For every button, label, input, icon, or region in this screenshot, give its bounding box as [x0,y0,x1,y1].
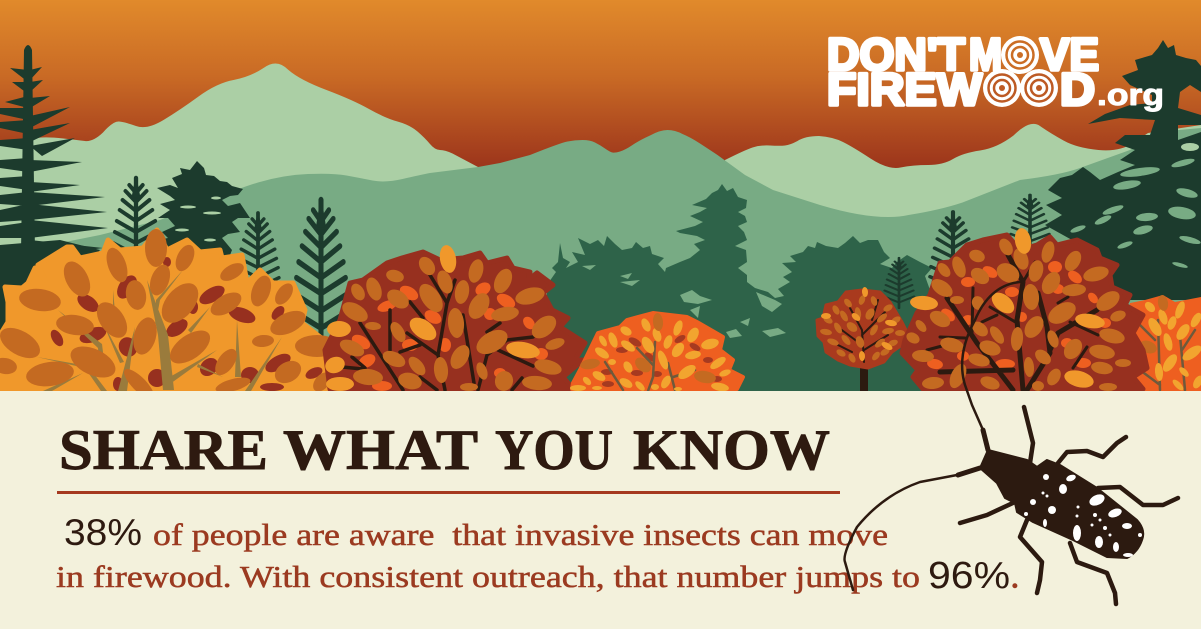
beetle legs [960,407,1178,604]
orange leaves [926,261,1111,370]
right bush leaves [1129,300,1201,392]
logo ring O right [1020,69,1058,107]
leafy pine, left-centre [157,161,250,282]
cream lower panel [0,391,1201,629]
dark branches [342,275,533,390]
body line 1 stat: 38% [64,512,142,553]
logo wordmark: Don't: DON'T [827,29,965,80]
small tree leaves [820,294,905,364]
heading: KNOW [633,419,830,482]
closing period: . [1011,560,1019,595]
beetle white spots [1024,473,1142,557]
tan branches [37,270,282,391]
small tree branches [835,300,888,362]
beetle antennae [844,282,1020,590]
forest light gaps [582,265,786,338]
yellow leaves [570,317,732,393]
brown leaves [579,313,717,385]
right bush brown leaves [1137,294,1169,356]
divider rule [57,491,840,494]
brown leaves [904,236,1131,392]
heading [59,419,830,482]
pine trees, right [1045,40,1201,300]
logo ring O top [1001,36,1039,74]
orange-brown leaves of yellow bush [0,229,339,403]
heading: WHAT [283,419,478,482]
heading: YOU [495,419,613,482]
small spruce trees, left [112,178,349,344]
red leaves of yellow bush [48,257,324,391]
dark red leaves [601,333,722,387]
orange bush, centre [570,313,743,393]
logo ring O left [983,69,1021,107]
yellow bush, left [0,229,355,403]
beetle illustration [844,282,1178,604]
dark branches [940,255,1097,390]
logo wordmark: Fire W: FIREW [827,64,983,115]
body line 1 text: of people are aware that invasive insects can move [153,517,888,552]
body line 2 text: in firewood. With consistent outreach, that number jumps to [56,559,920,594]
yellow highlight leaves [909,227,1106,391]
orange bush, far right [1125,294,1201,392]
beetle body [980,450,1143,558]
logo [827,29,1164,115]
red bush, centre-left [323,244,585,393]
mid green mountain range [0,128,1201,391]
distant forest silhouette [545,184,960,391]
red bush, right [902,227,1147,392]
bright orange leaves [349,280,548,391]
small tree yellow leaves [821,287,897,361]
light green mountain range [0,63,1201,300]
antenna bases [958,430,988,475]
logo wordmark: VE: VE [1040,29,1099,80]
small spruces, right [884,195,1050,308]
grey branches [605,342,695,391]
yellow highlight leaves [323,244,541,391]
right forest light gaps [1070,157,1201,269]
body line 2 stat: 96% [928,555,1010,597]
logo wordmark: .org: .org [1097,77,1164,112]
brown leaves [337,254,566,393]
logo wordmark: M: M [969,29,1002,80]
heading: SHARE [59,419,268,482]
logo wordmark: D: D [1060,64,1095,115]
small round tree [817,287,906,392]
sky background [0,0,1201,392]
right bush branches [1140,320,1195,390]
big pine tree, left [0,45,108,330]
